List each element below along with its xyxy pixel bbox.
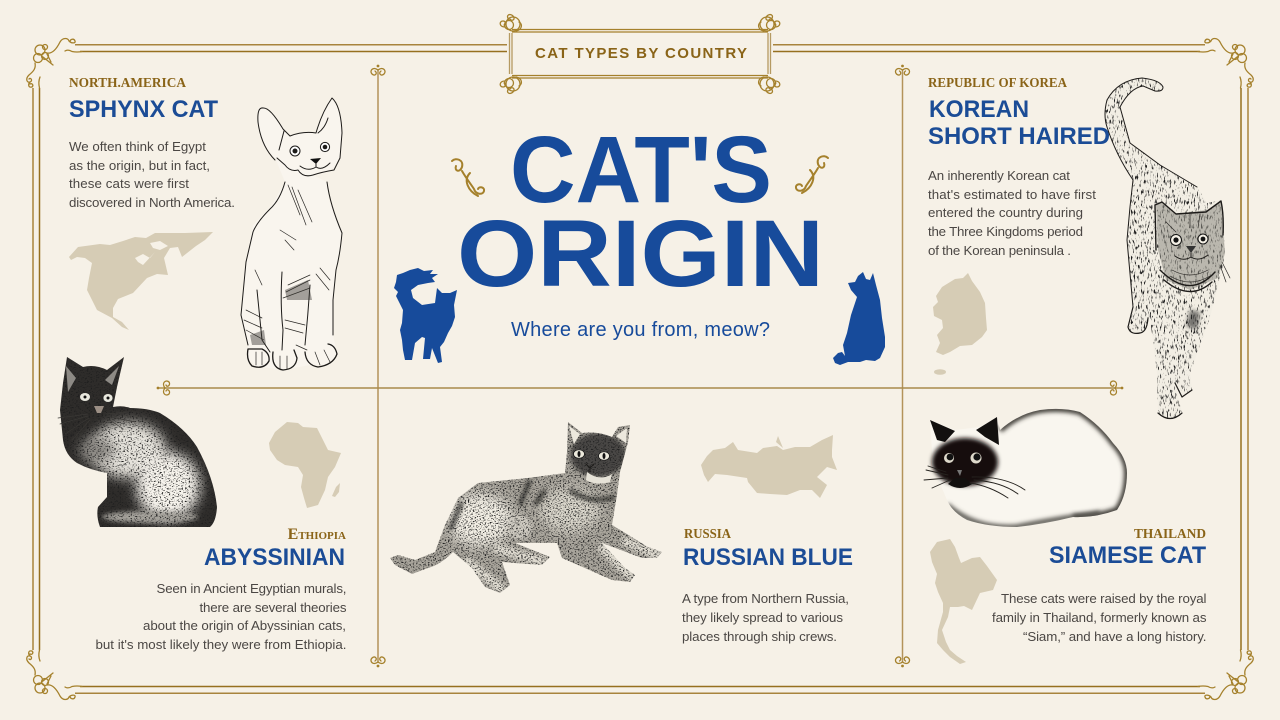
text block: An inherently Korean cat xyxy=(928,168,1070,183)
text block: family in Thailand, formerly known as xyxy=(992,610,1207,625)
text block: These cats were raised by the royal xyxy=(1001,591,1207,606)
text block: discovered in North America. xyxy=(69,195,235,210)
main title: ORIGIN xyxy=(457,201,824,307)
label: region: Ethiopia xyxy=(288,526,346,543)
text block: the Three Kingdoms period xyxy=(928,224,1083,239)
label: region: NORTH.AMERICA xyxy=(69,75,186,90)
panel: North America xyxy=(69,75,342,370)
map: North America xyxy=(69,232,213,330)
text block xyxy=(928,168,1096,258)
map: South Korea xyxy=(933,273,987,375)
icon: title flourish left xyxy=(452,159,484,196)
main title: CAT'S xyxy=(510,117,772,223)
label: region: THAILAND xyxy=(1134,526,1206,541)
illustration: sphynx cat xyxy=(241,98,342,370)
icon: blue cat silhouette left xyxy=(394,268,457,363)
heading: Korean Short Haired: SHORT HAIRED xyxy=(928,123,1110,150)
heading: Korean Short Haired: KOREAN xyxy=(929,96,1029,123)
map: Thailand xyxy=(930,539,997,664)
text block xyxy=(96,581,347,652)
text block: places through ship crews. xyxy=(682,629,837,644)
map: Africa xyxy=(269,422,341,508)
text block: of the Korean peninsula . xyxy=(928,243,1071,258)
text block: entered the country during xyxy=(928,205,1083,220)
label: region: REPUBLIC OF KOREA xyxy=(928,75,1067,90)
text block: these cats were first xyxy=(69,176,189,191)
heading: Sphynx Cat: SPHYNX CAT xyxy=(69,96,218,123)
label: region: RUSSIA xyxy=(684,526,731,541)
text block: they likely spread to various xyxy=(682,610,843,625)
text block xyxy=(992,591,1207,644)
illustration: abyssinian cat xyxy=(58,357,217,527)
heading: Siamese Cat: SIAMESE CAT xyxy=(1049,542,1206,569)
illustration: siamese cat xyxy=(924,405,1135,530)
icon: title flourish right xyxy=(796,156,828,193)
text block xyxy=(69,139,235,210)
panel: Thailand xyxy=(924,405,1207,664)
panel: Russia xyxy=(385,418,853,644)
main title xyxy=(457,117,824,307)
illustration: russian blue cat xyxy=(385,418,670,598)
text block: “Siam,” and have a long history. xyxy=(1023,629,1206,644)
header badge xyxy=(500,15,780,93)
map: Russia xyxy=(701,435,837,498)
header badge: CAT TYPES BY COUNTRY xyxy=(535,45,747,62)
heading: Abyssinian: ABYSSINIAN xyxy=(204,544,345,571)
text block: We often think of Egypt xyxy=(69,139,206,154)
icon: blue cat silhouette right xyxy=(833,272,885,365)
inner grid dividers xyxy=(157,65,1123,667)
text block: that's estimated to have first xyxy=(928,187,1096,202)
text block: but it's most likely they were from Ethiopia. xyxy=(96,637,346,652)
text block: there are several theories xyxy=(200,600,347,615)
text block: as the origin, but in fact, xyxy=(69,158,210,173)
heading: Russian Blue: RUSSIAN BLUE xyxy=(683,544,853,571)
heading: Korean Short Haired xyxy=(928,96,1110,150)
panel: Ethiopia xyxy=(50,350,347,652)
text block: about the origin of Abyssinian cats, xyxy=(143,618,346,633)
text block: A type from Northern Russia, xyxy=(682,591,849,606)
text block xyxy=(682,591,849,644)
panel: Republic of Korea xyxy=(928,75,1230,418)
subtitle: Where are you from, meow? xyxy=(511,319,770,341)
text block: Seen in Ancient Egyptian murals, xyxy=(156,581,346,596)
illustration: korean short haired cat xyxy=(1105,78,1230,418)
